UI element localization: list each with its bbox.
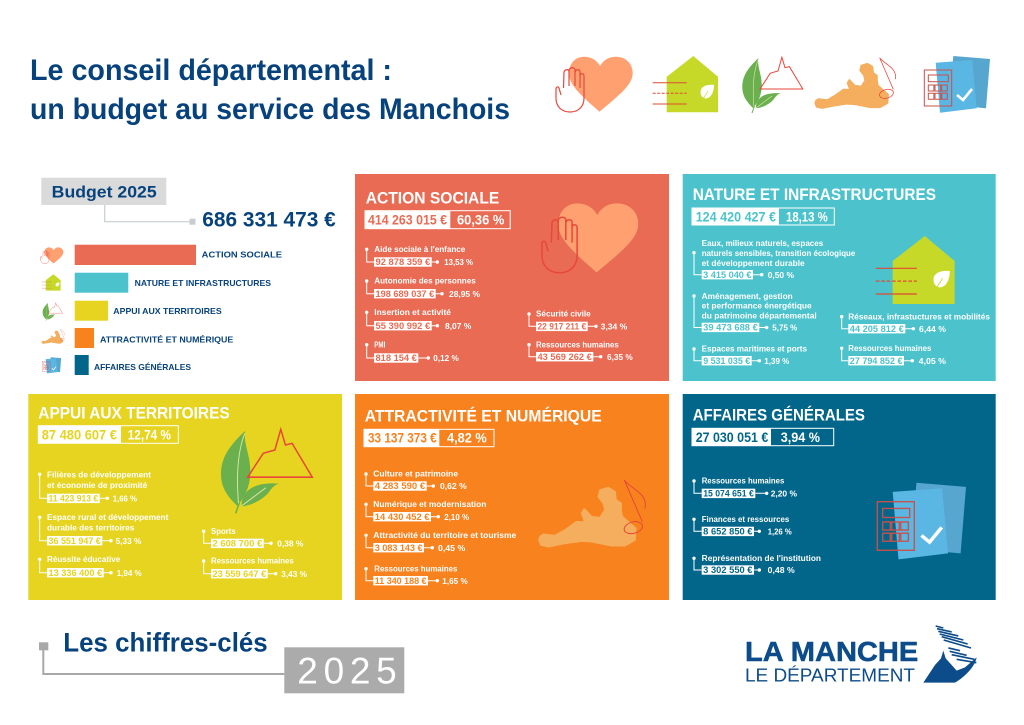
logo: La Manche Le Département: LA MANCHE [745, 636, 918, 667]
item: culture: 4 283 590 € [375, 481, 425, 491]
total amount: 686 331 473 € [202, 209, 336, 232]
heading: ACTION SOCIALE [366, 188, 499, 207]
total [365, 211, 510, 229]
total [38, 426, 178, 443]
item: filières [38, 470, 151, 504]
total: 87 480 607 € [42, 427, 117, 443]
total: 3,94 % [781, 429, 820, 445]
item: ressources humaines: 6,35 % [607, 352, 633, 362]
icon: leaves and church [742, 57, 803, 113]
logo: La Manche Le Département [745, 626, 977, 686]
icon: house and leaf [876, 236, 955, 304]
total: 33 137 373 € [368, 430, 437, 446]
total [692, 428, 834, 446]
item: ressources humaines: Ressources humaines [848, 344, 932, 353]
panel: attractivité et numérique [355, 394, 669, 600]
total: 4,82 % [447, 430, 487, 446]
item: attractivité du territoire: 3 083 143 € [375, 543, 422, 553]
total: 12,74 % [128, 427, 171, 443]
item: finances [692, 515, 792, 537]
icon: reader and music note [539, 480, 645, 547]
item: attractivité du territoire: Attractivité du territoire et tourisme [373, 531, 517, 540]
item: aide sociale: 92 878 359 € [376, 257, 430, 267]
item: insertion: 8,07 % [445, 321, 472, 331]
item: espaces maritimes: 9 531 035 € [703, 356, 750, 366]
item: espaces maritimes: Espaces maritimes et ports [702, 345, 808, 354]
item: ressources humaines: 27 794 852 € [850, 356, 902, 366]
item: ressources humaines: 1,65 % [442, 576, 468, 586]
item: ressources humaines [692, 477, 797, 499]
item: espaces maritimes: 1,39 % [764, 356, 790, 366]
item: réussite éducative: 1,94 % [117, 568, 142, 578]
bar: action sociale [75, 245, 282, 265]
item: aide sociale [365, 245, 473, 267]
bar: appui aux territoires [75, 301, 222, 321]
item: sports [202, 527, 304, 549]
item: ressources humaines: 23 559 647 € [212, 569, 266, 579]
item: ressources humaines: Ressources humaines [374, 564, 458, 573]
item: sécurité civile: 22 917 211 € [538, 322, 586, 332]
title: Le conseil départemental : [30, 54, 392, 87]
bar: attractivité et numérique [75, 328, 234, 348]
total: 60,36 % [457, 211, 505, 227]
item: autonomie: 198 689 037 € [376, 289, 434, 299]
item: PMI: 818 154 € [376, 353, 417, 363]
total: 18,13 % [786, 209, 828, 225]
item: filières: et économie de proximité [47, 481, 148, 490]
total [692, 208, 834, 225]
item: eaux et milieux: naturels sensibles, transition écologique [702, 249, 856, 258]
item: espace rural [38, 513, 169, 546]
panel: affaires générales [683, 394, 996, 600]
item: eaux et milieux: 3 415 040 € [703, 270, 752, 280]
total: 27 030 051 € [696, 429, 768, 445]
item: espace rural: durable des territoires [47, 523, 135, 532]
icon: reader and music note [815, 58, 896, 108]
heading: APPUI AUX TERRITOIRES [38, 403, 230, 422]
bar: affaires générales [75, 355, 191, 375]
item: espace rural: 5,33 % [116, 536, 142, 546]
item: réseaux: 44 205 812 € [850, 324, 904, 334]
item: numérique: 2,10 % [444, 512, 469, 522]
item: ressources humaines [202, 557, 307, 579]
item: eaux et milieux: et développement durable [702, 259, 805, 268]
item: attractivité du territoire: 0,45 % [438, 543, 466, 553]
item: représentation [692, 554, 821, 575]
budget label: Budget 2025 [52, 182, 157, 201]
bar: affaires générales: AFFAIRES GÉNÉRALES [94, 362, 191, 372]
item: réseaux: 6,44 % [919, 324, 946, 334]
icon: calculator and documents [924, 56, 990, 113]
item: espace rural: 36 551 947 € [48, 536, 101, 546]
item: représentation: 0,48 % [768, 565, 795, 575]
total [364, 429, 494, 447]
item: réseaux: Réseaux, infrastuctures et mobilités [848, 312, 991, 321]
item: attractivité du territoire [364, 531, 517, 553]
bar: nature et infrastructures [75, 273, 271, 293]
item: aide sociale: Aide sociale à l'enfance [374, 245, 466, 254]
item: réussite éducative: 13 336 400 € [48, 568, 102, 578]
item: autonomie: Autonomie des personnes [374, 277, 476, 286]
icon: heart and hand [556, 57, 633, 112]
bar: appui aux territoires: APPUI AUX TERRITOIRES [113, 306, 222, 316]
item: ressources humaines [527, 340, 633, 362]
item: aménagement: du patrimoine départemental [702, 311, 817, 320]
item: ressources humaines: 4,05 % [919, 356, 946, 366]
item: numérique: 14 430 452 € [375, 512, 430, 522]
logo: La Manche Le Département: LE DÉPARTEMENT [745, 666, 915, 686]
item: numérique: Numérique et modernisation [373, 500, 486, 509]
icon: calculator and documents [877, 483, 966, 559]
item: représentation: Représentation de l'institution [702, 554, 821, 563]
title: un budget au service des Manchois [30, 93, 510, 126]
item: ressources humaines: Ressources humaines [702, 477, 785, 486]
item: aménagement: et performance énergétique [702, 302, 812, 311]
panel: action sociale [355, 174, 669, 381]
heading: AFFAIRES GÉNÉRALES [693, 406, 865, 425]
item: PMI: 0,12 % [433, 353, 459, 363]
item: espaces maritimes [692, 345, 808, 366]
budget label [41, 178, 166, 205]
item: sports: 0,38 % [277, 539, 304, 549]
item: culture: Culture et patrimoine [373, 470, 459, 479]
item: eaux et milieux [692, 239, 856, 280]
bar: action sociale: ACTION SOCIALE [202, 250, 282, 260]
item: aménagement: 39 473 688 € [703, 323, 758, 333]
legend icon: nature [42, 274, 61, 291]
title [30, 54, 510, 126]
item: réseaux [840, 312, 991, 334]
item: réussite éducative: Réussite éducative [47, 555, 121, 564]
icon: leaves and church [221, 429, 312, 513]
bar: attractivité et numérique: ATTRACTIVITÉ ET NUMÉRIQUE [100, 334, 234, 344]
total: 124 420 427 € [696, 209, 776, 225]
item: insertion: Insertion et activité [374, 308, 452, 317]
legend icon: action sociale [41, 247, 63, 264]
item: ressources humaines: 2,20 % [771, 489, 797, 499]
item: insertion [365, 308, 472, 331]
bar chart: budget breakdown [41, 245, 282, 375]
item: eaux et milieux: Eaux, milieux naturels, espaces [702, 239, 824, 248]
item: ressources humaines: Ressources humaines [536, 340, 619, 349]
item: PMI: PMI [374, 340, 385, 349]
item: sports: 2 608 700 € [212, 539, 262, 549]
item: sécurité civile [527, 310, 628, 332]
year badge: 2025 [297, 650, 397, 691]
legend icon: appui [43, 303, 63, 321]
total: 414 263 015 € [368, 211, 447, 227]
item: espace rural: Espace rural et développement [47, 513, 169, 522]
item: aménagement [692, 292, 817, 333]
item: sports: Sports [211, 527, 236, 536]
item: PMI [365, 340, 459, 363]
item: ressources humaines: 11 340 188 € [375, 576, 426, 586]
item: aide sociale: 13,53 % [444, 257, 473, 267]
item: filières: 1,66 % [113, 494, 137, 504]
heading: NATURE ET INFRASTRUCTURES [693, 185, 936, 204]
item: ressources humaines: 15 074 651 € [703, 489, 754, 499]
panel: nature et infrastructures [683, 174, 996, 381]
item: autonomie [365, 277, 480, 299]
item: insertion: 55 390 992 € [376, 321, 430, 331]
item: sécurité civile: 3,34 % [601, 322, 628, 332]
heading: ATTRACTIVITÉ ET NUMÉRIQUE [365, 406, 602, 425]
bar: nature et infrastructures: NATURE ET INFRASTRUCTURES [135, 278, 271, 288]
item: ressources humaines: 3,43 % [281, 569, 307, 579]
item: ressources humaines: 43 569 262 € [538, 352, 592, 362]
item: représentation: 3 302 550 € [703, 565, 752, 575]
item: sécurité civile: Sécurité civile [536, 310, 591, 319]
icon: house and leaf [653, 56, 718, 112]
footer heading: Les chiffres-clés [63, 628, 268, 658]
item: aménagement: Aménagement, gestion [702, 292, 793, 301]
item: ressources humaines: Ressources humaines [211, 557, 294, 566]
item: finances: 8 652 850 € [703, 527, 752, 537]
item: ressources humaines [840, 344, 946, 366]
panel: budget total [41, 178, 336, 232]
panel: appui aux territoires [28, 394, 342, 600]
item: filières: 11 423 913 € [48, 494, 98, 504]
legend icon: attractivité [42, 329, 65, 344]
footer: les chiffres-clés 2025 [39, 628, 404, 693]
item: autonomie: 28,95 % [449, 289, 480, 299]
item: aménagement: 5,75 % [772, 323, 798, 333]
item: ressources humaines [364, 564, 468, 586]
item: finances: 1,26 % [768, 527, 792, 537]
item: eaux et milieux: 0,50 % [768, 270, 794, 280]
item: culture: 0,62 % [440, 481, 467, 491]
item: numérique [364, 500, 486, 522]
item: finances: Finances et ressources [702, 515, 790, 524]
item: culture [364, 470, 467, 491]
icon: heart and hand [542, 203, 638, 273]
legend icon: affaires générales [42, 357, 61, 373]
item: réussite éducative [38, 555, 142, 578]
item: filières: Filières de développement [47, 470, 151, 479]
